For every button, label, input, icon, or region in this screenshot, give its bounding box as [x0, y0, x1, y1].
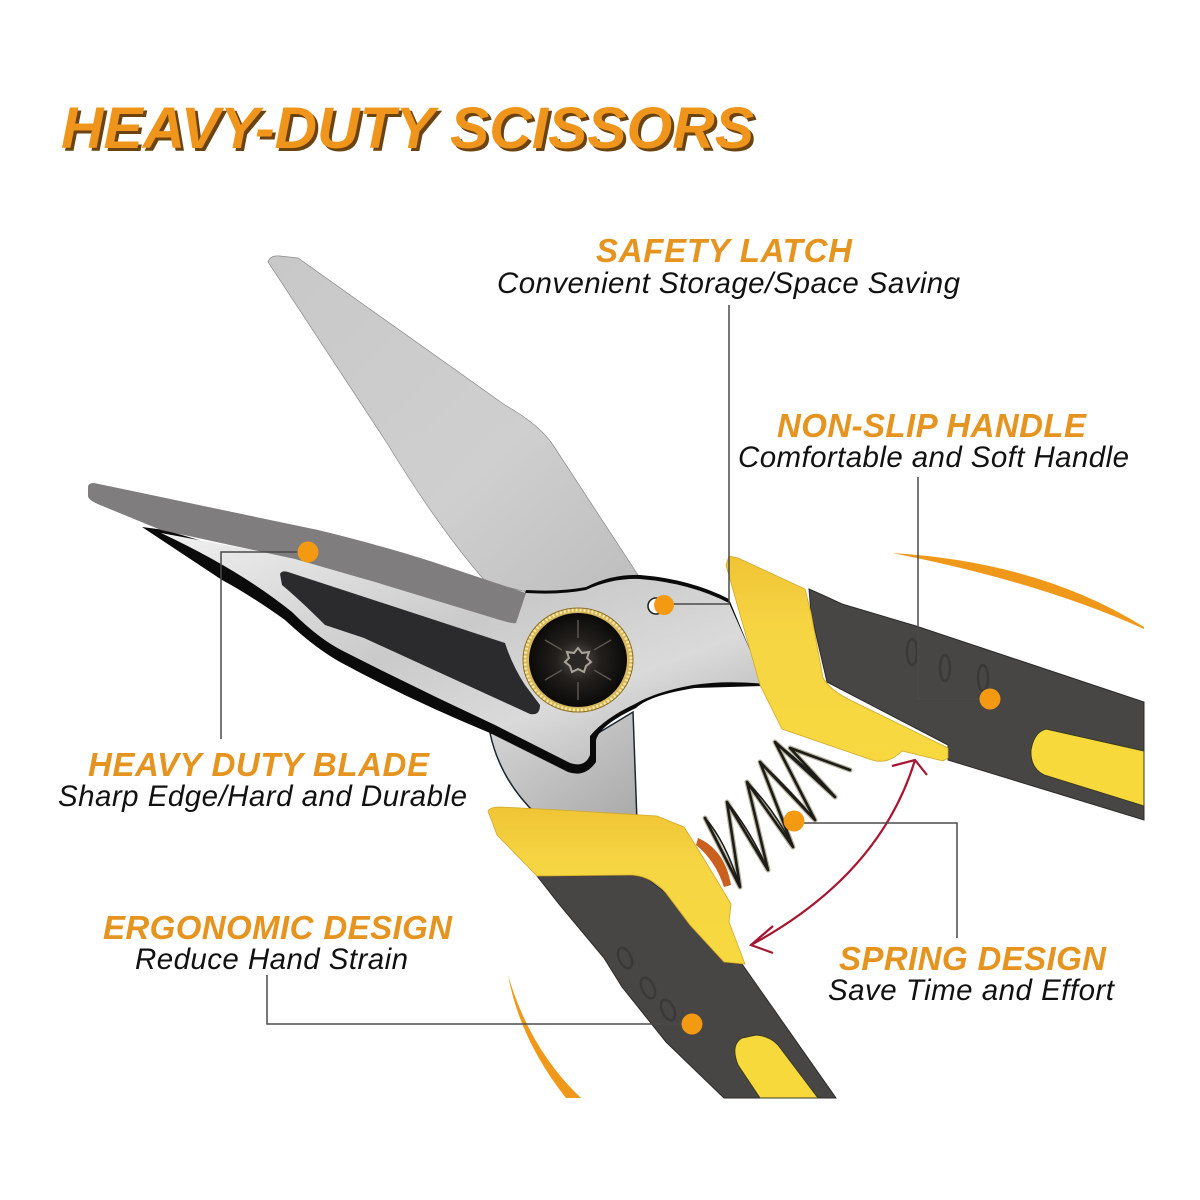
- callout: safety latch: Convenient Storage/Space Saving: [497, 267, 961, 300]
- grey sharpened edge band: [88, 483, 526, 623]
- coil spring: [705, 742, 850, 887]
- orange swoosh top right: [892, 553, 1144, 629]
- top grip ribs: [907, 639, 988, 691]
- lower blade black edge: [142, 527, 765, 774]
- red range-of-motion arrow: [751, 760, 927, 953]
- callout: spring design: Save Time and Effort: [828, 974, 1116, 1007]
- callout: spring design: [784, 810, 1116, 1007]
- lower blade steel body: [161, 533, 765, 764]
- callout: ergonomic design: [103, 909, 702, 1034]
- callout: non-slip handle: NON-SLIP HANDLE: [777, 407, 1087, 444]
- top handle yellow collar: [726, 556, 948, 761]
- bottom handle grip: [537, 873, 836, 1098]
- bottom grip ribs: [615, 945, 678, 1023]
- callout: ergonomic design: ERGONOMIC DESIGN: [103, 909, 453, 946]
- callout: non-slip handle: Comfortable and Soft Handle: [738, 441, 1129, 474]
- safety latch hole: [648, 598, 664, 614]
- callout: heavy duty blade: Sharp Edge/Hard and Durable: [58, 780, 467, 813]
- title: HEAVY-DUTY SCISSORS: [61, 96, 754, 161]
- scissors illustration: [88, 256, 1144, 1098]
- upper blade: [268, 256, 640, 600]
- bottom handle yellow collar: [488, 807, 745, 964]
- callout: heavy duty blade: HEAVY DUTY BLADE: [88, 746, 430, 783]
- orange spring washer: [696, 838, 731, 887]
- callout: ergonomic design: Reduce Hand Strain: [135, 943, 408, 976]
- callout: safety latch: [497, 232, 961, 615]
- top handle grip: [809, 589, 1144, 820]
- bottom handle yellow inset: [735, 1035, 818, 1098]
- callout: heavy duty blade: [58, 542, 467, 813]
- title: HEAVY-DUTY SCISSORS: [64, 99, 757, 164]
- lower rear blade: [490, 712, 637, 822]
- dark blade inset: [280, 571, 540, 714]
- callout: non-slip handle: [738, 407, 1129, 710]
- top handle yellow inset: [1031, 729, 1144, 806]
- pivot screw: [523, 608, 633, 712]
- orange swoosh bottom left: [508, 975, 581, 1098]
- callout: safety latch: SAFETY LATCH: [596, 232, 853, 269]
- callout: spring design: SPRING DESIGN: [839, 940, 1107, 977]
